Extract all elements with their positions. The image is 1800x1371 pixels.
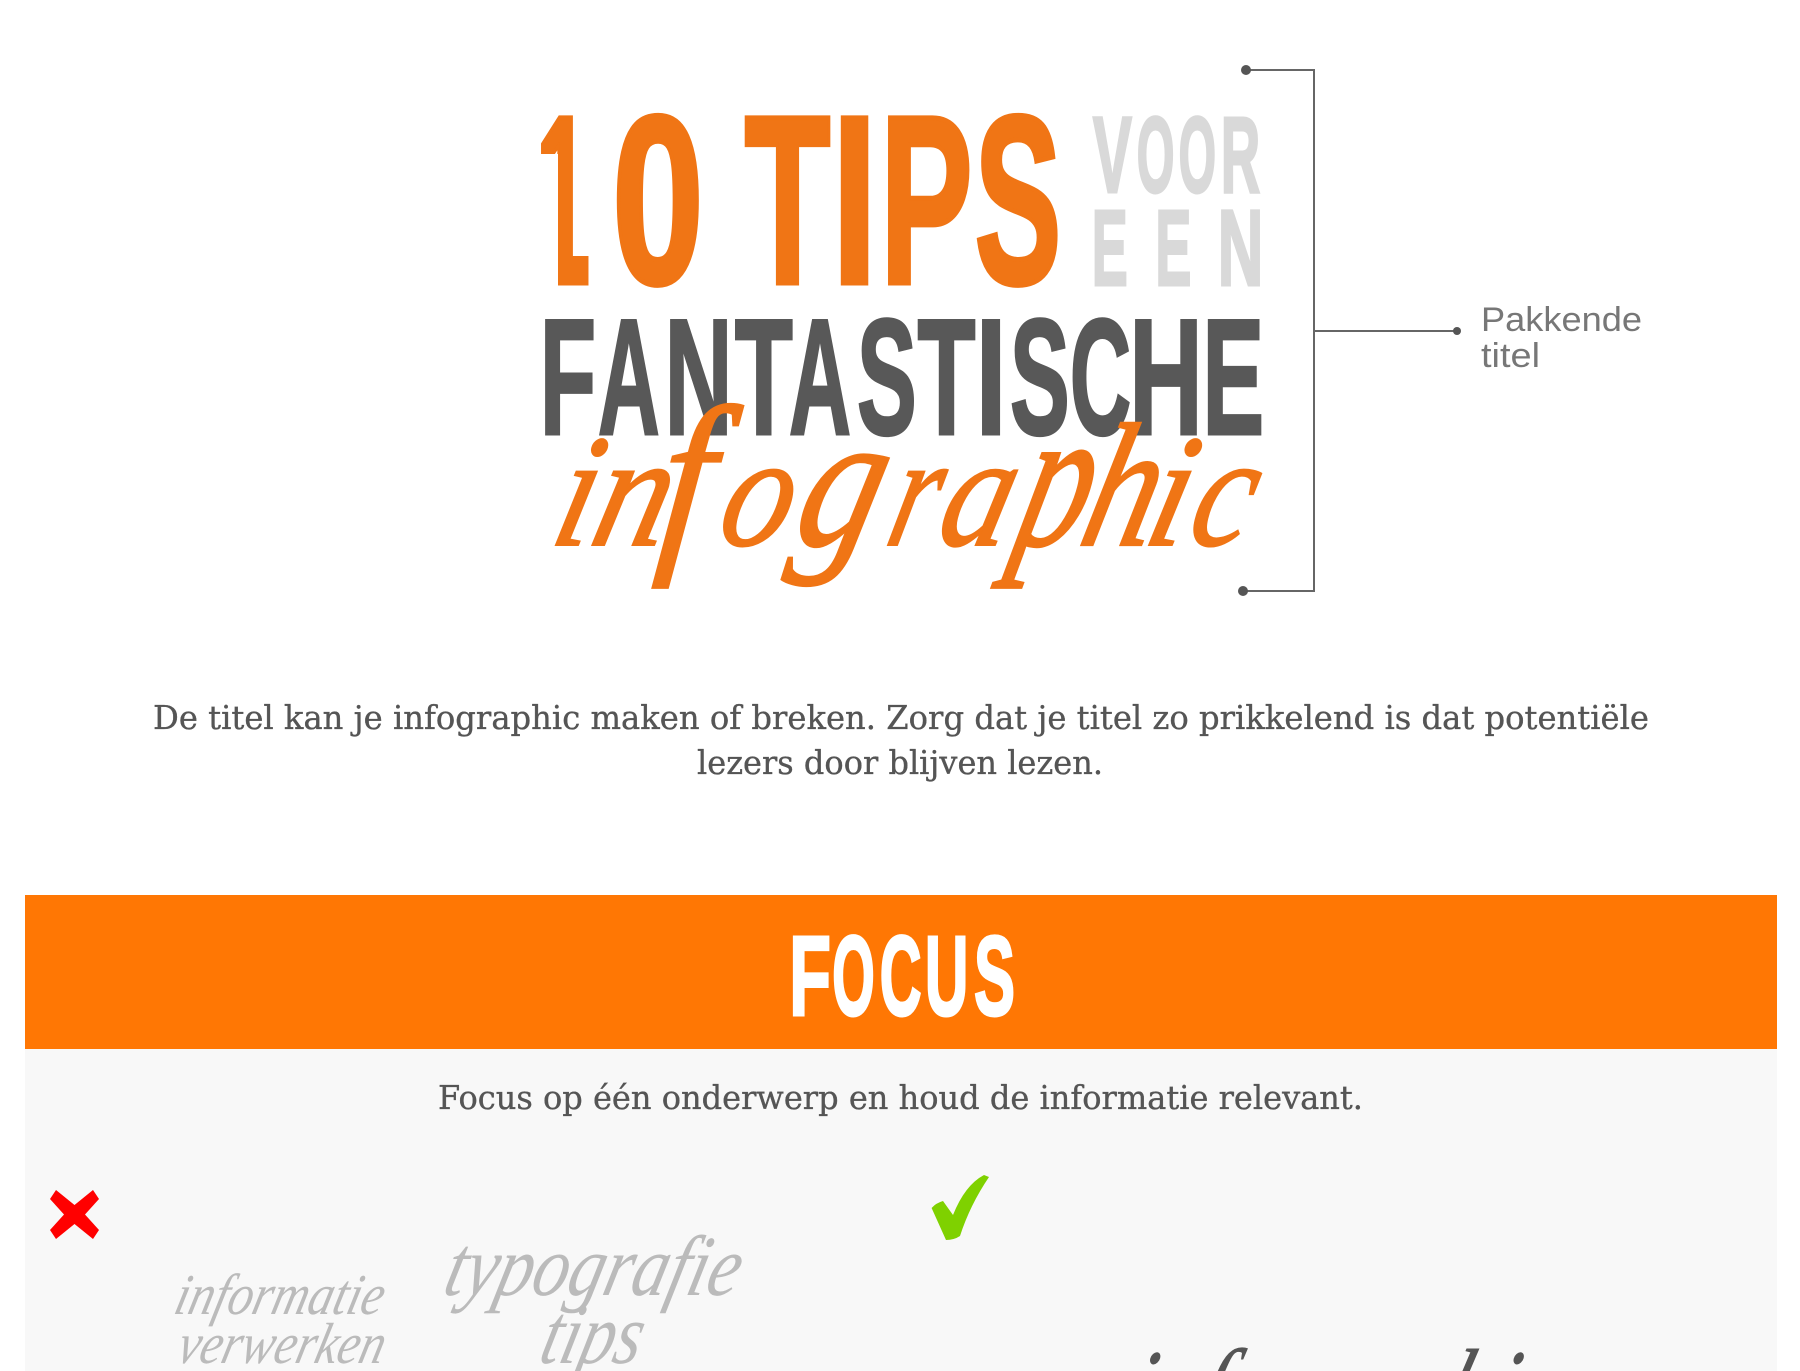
title word: voor — [1093, 94, 1260, 215]
panel: focus — [25, 895, 1777, 1371]
title line: fantastische: T — [735, 285, 793, 469]
title line: fantastische: C — [1070, 285, 1131, 469]
title line: infographic: g — [780, 374, 915, 587]
title line: fantastische: A — [598, 285, 660, 469]
title — [535, 66, 1280, 589]
title line: infographic: p — [991, 367, 1124, 588]
title line: fantastische: S — [1010, 285, 1070, 469]
title line: infographic: a — [925, 403, 1039, 580]
title word: voor: O — [1179, 94, 1216, 215]
wrong example: unfocused words: informatie — [169, 1263, 393, 1327]
title line: infographic — [539, 367, 1280, 589]
title line: infographic: r — [874, 403, 965, 580]
title line: fantastische: H — [1129, 285, 1203, 469]
wrong example: unfocused words — [169, 1218, 754, 1371]
section header band — [25, 895, 1777, 1049]
title bracket annotation — [1238, 65, 1461, 596]
title line: 10 tips: T — [745, 66, 830, 334]
title word: voor: R — [1221, 94, 1260, 215]
title word: voor: V — [1093, 94, 1132, 215]
heading: focus: U — [925, 913, 968, 1039]
title word: een — [1092, 187, 1263, 308]
title line: 10 tips: 0 — [612, 66, 704, 334]
annotation label: pakkende titel — [1481, 301, 1642, 375]
heading: focus — [789, 913, 1015, 1039]
title line: infographic: n — [578, 403, 696, 580]
focus description: Focus op één onderwerp en houd de informatie relevant. — [438, 1078, 1363, 1117]
title line: fantastische: F — [540, 285, 596, 469]
intro text: De titel kan je infographic maken of breken. Zorg dat je titel zo prikkelend is dat potentiële — [153, 698, 1649, 737]
title line: 10 tips: I — [831, 66, 878, 334]
title line: fantastische — [540, 285, 1264, 469]
icon: red cross — [50, 1190, 99, 1239]
title line: infographic: i — [539, 403, 622, 580]
wrong example: unfocused words: typografie — [436, 1218, 754, 1314]
intro text: lezers door blijven lezen. — [697, 743, 1103, 782]
annotation label: pakkende titel: titel — [1481, 337, 1540, 375]
title word: een: N — [1218, 187, 1263, 308]
title line: infographic: h — [1067, 389, 1187, 583]
title line: 10 tips — [541, 112, 1058, 288]
title line: infographic: o — [705, 403, 819, 580]
heading: focus: S — [974, 913, 1015, 1039]
heading: focus: C — [880, 913, 922, 1039]
intro text — [153, 698, 1649, 782]
title line: infographic: f — [650, 368, 748, 589]
title word: voor: O — [1137, 94, 1174, 215]
heading: focus: F — [789, 913, 831, 1039]
title line: fantastische: I — [976, 285, 1006, 469]
title line: fantastische: N — [665, 285, 732, 469]
title line: 10 tips: 1 — [535, 66, 590, 334]
title line: infographic: c — [1176, 403, 1280, 580]
title word: een: E — [1092, 187, 1128, 308]
heading: focus: O — [832, 913, 875, 1039]
title line: fantastische: S — [857, 285, 917, 469]
title line: fantastische: E — [1202, 285, 1264, 469]
icon: green check — [932, 1175, 989, 1240]
title line: fantastische: T — [918, 285, 976, 469]
title line: fantastische: A — [789, 285, 851, 469]
title line: 10 tips: S — [975, 66, 1061, 334]
title word: een: E — [1155, 187, 1191, 308]
title line: 10 tips: P — [880, 66, 973, 334]
annotation label: pakkende titel: Pakkende — [1481, 301, 1642, 339]
title line: infographic: i — [1132, 403, 1216, 580]
